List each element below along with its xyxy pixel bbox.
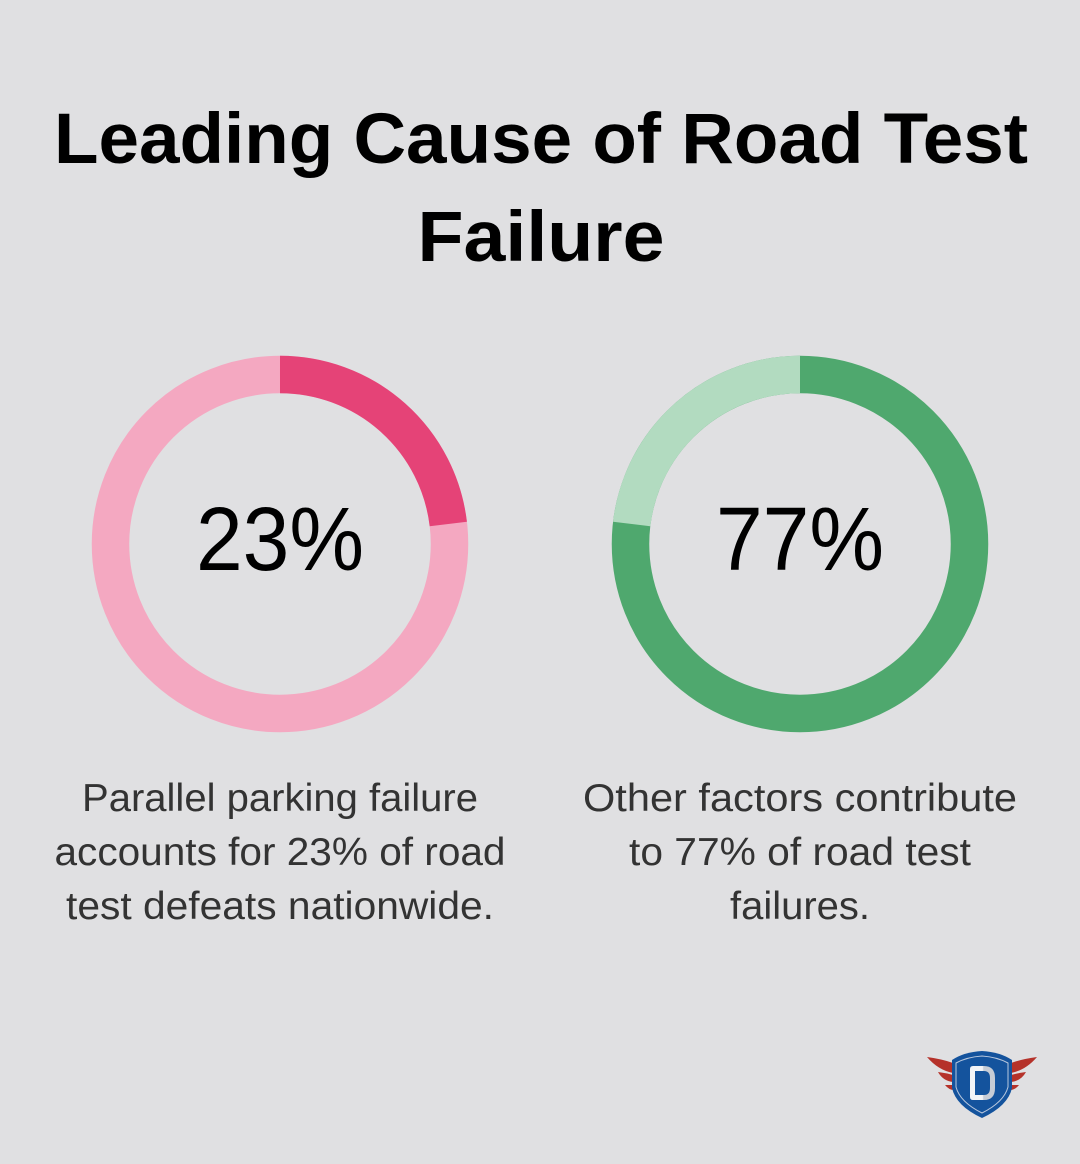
description: parallel parking: test defeats nationwide. — [66, 885, 494, 928]
donut chart: 23% — [110, 374, 450, 714]
icon: winged shield logo — [927, 1051, 1037, 1118]
title — [54, 100, 1028, 277]
description: parallel parking — [54, 777, 505, 928]
description: parallel parking: Parallel parking failure — [82, 777, 478, 820]
title: Leading Cause of Road Test — [54, 100, 1028, 179]
description: other factors: to 77% of road test — [629, 831, 971, 874]
description: other factors: failures. — [730, 885, 870, 928]
stat value: 77%: 77% — [716, 490, 884, 590]
description: other factors — [583, 777, 1017, 928]
description: other factors: Other factors contribute — [583, 777, 1017, 820]
title: Failure — [418, 198, 664, 277]
description: parallel parking: accounts for 23% of road — [54, 831, 505, 874]
donut chart: 77% — [630, 374, 970, 714]
stat value: 23%: 23% — [196, 490, 364, 590]
panel: parallel parking statistic — [54, 374, 505, 928]
panel: other factors statistic — [583, 374, 1017, 928]
